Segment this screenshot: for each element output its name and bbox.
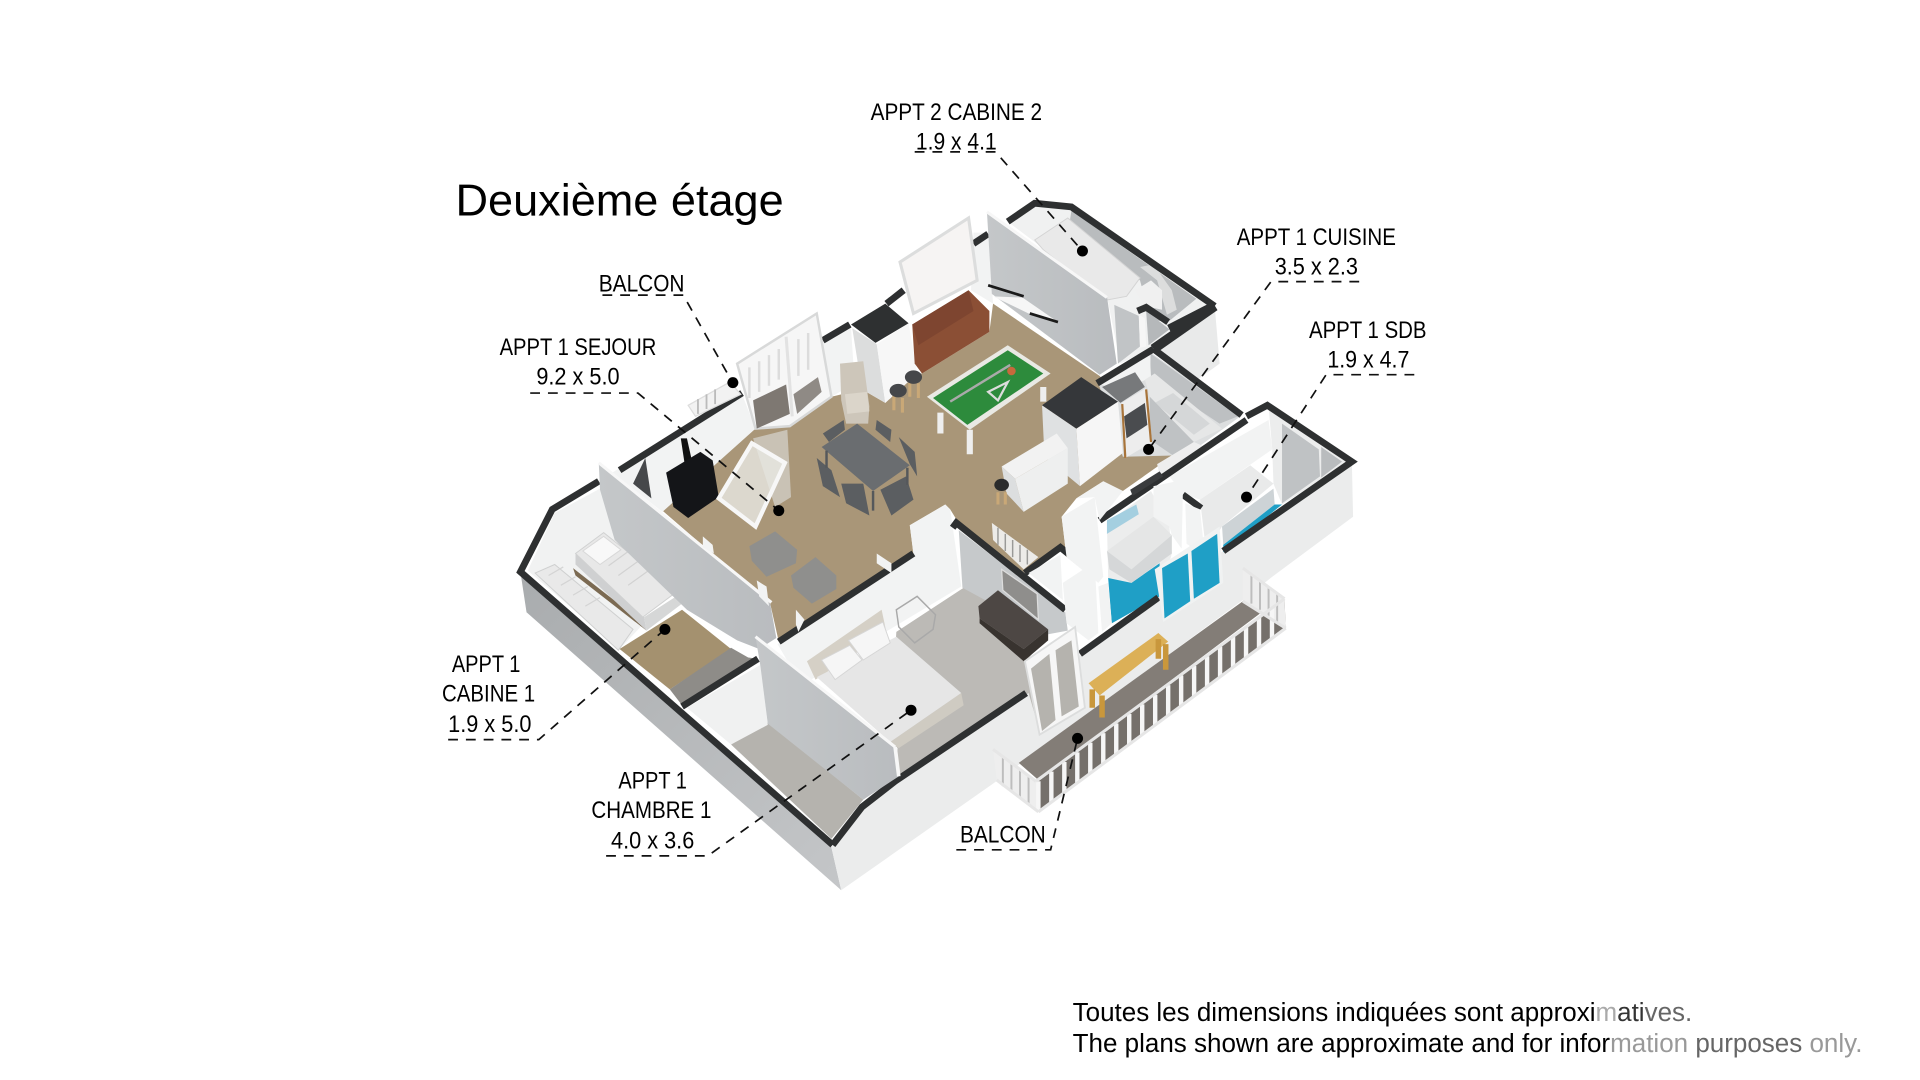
room: Appt 1 SDB (1169, 407, 1352, 552)
pool table (927, 345, 1051, 454)
label: balcon north: BALCON (599, 270, 684, 297)
bench (535, 564, 633, 650)
dresser (978, 590, 1048, 661)
callout leader lines (448, 152, 1414, 856)
label: Appt 1 SDB (1309, 317, 1427, 373)
stools (890, 370, 1009, 504)
washbasin (1107, 517, 1172, 583)
label: Appt 1 chambre 1: APPT 1 (618, 768, 687, 795)
bathtub (1200, 465, 1273, 551)
poufs (749, 531, 836, 604)
armchair (840, 361, 869, 424)
dark-top unit (1042, 377, 1123, 486)
large window (900, 218, 977, 313)
blue floor strip (1223, 504, 1282, 552)
wall mirror (1002, 569, 1038, 620)
cabine 2 wardrobe panel (987, 212, 1117, 375)
wall: living room back wall (612, 233, 993, 512)
wood stove with flue (666, 438, 719, 518)
sofa (912, 290, 989, 373)
label: Appt 1 sejour: 9.2 x 5.0 (536, 363, 620, 390)
callout dots (659, 246, 1252, 744)
label: Appt 1 cabine 1 (442, 651, 535, 738)
kitchen counter (1145, 373, 1222, 475)
label: Appt 1 cabine 1: APPT 1 (452, 651, 520, 678)
label: Appt 1 cabine 1: CABINE 1 (442, 681, 535, 708)
stairs black lines (988, 285, 1058, 322)
footer note: Toutes les dimensions indiquées sont approximatives. (1073, 997, 1692, 1027)
single bed (576, 533, 682, 631)
bed (1035, 218, 1140, 300)
label: Appt 1 sejour (500, 334, 656, 390)
label: Appt 1 SDB: 1.9 x 4.7 (1327, 346, 1409, 373)
open door frame (719, 443, 785, 527)
label: Appt 1 sejour: APPT 1 SEJOUR (500, 334, 656, 361)
black wall tops (520, 203, 1352, 845)
under-bed edge (573, 568, 647, 631)
room: Appt 1 cabine 1 (528, 489, 682, 650)
dining table and chairs (817, 420, 917, 516)
label: Appt 2 cabine 2 (871, 99, 1042, 155)
grey door panel (1114, 305, 1140, 364)
exterior walls (520, 306, 1353, 890)
label: Appt 1 cuisine: 3.5 x 2.3 (1275, 253, 1358, 280)
footer note: The plans shown are approximate and for information purposes only. (1073, 1028, 1862, 1058)
washbasin (1135, 280, 1162, 310)
label: Appt 2 cabine 2: 1.9 x 4.1 (916, 128, 997, 155)
room: Appt 1 chambre 1 (687, 504, 1068, 748)
double bed (807, 610, 964, 748)
lounge armchair (753, 430, 791, 507)
interior white piers (703, 323, 1205, 640)
label: Appt 1 chambre 1: 4.0 x 3.6 (611, 828, 694, 855)
label: balcon south: BALCON (960, 821, 1046, 848)
cabine 1 wardrobe panel (599, 463, 776, 649)
footer note (1073, 997, 1862, 1058)
chimney block top (851, 304, 909, 343)
label: Appt 1 chambre 1: CHAMBRE 1 (591, 797, 711, 824)
label: Appt 1 cabine 1: 1.9 x 5.0 (448, 711, 531, 738)
white strip (1139, 315, 1146, 348)
label: Appt 2 cabine 2: APPT 2 CABINE 2 (871, 99, 1042, 126)
small railing by shower (992, 523, 1038, 569)
glass side table (896, 596, 936, 643)
label: Appt 1 SDB: APPT 1 SDB (1309, 317, 1427, 344)
room: Appt 2 cabine 2 (1008, 203, 1215, 364)
oven tower (1102, 372, 1152, 458)
room: shower room (1107, 491, 1172, 623)
grey tub front (1222, 489, 1275, 545)
television (633, 458, 651, 498)
blue tint behind basin (1107, 504, 1139, 534)
grey door panel (1282, 424, 1320, 503)
label: Appt 1 cuisine (1237, 224, 1396, 280)
title: Deuxième étage (456, 177, 784, 226)
chambre wardrobe panel (756, 637, 899, 800)
shower tube (1140, 264, 1177, 315)
room floors (620, 304, 1173, 839)
bedroom balcony door (1025, 627, 1085, 735)
grey recess (1146, 311, 1169, 345)
white cabinet (1002, 433, 1068, 512)
kitchen hob strip (1130, 471, 1163, 496)
bench (1089, 633, 1168, 718)
balcony door with small railing (688, 313, 831, 429)
balcony (993, 568, 1286, 812)
room: Appt 1 cuisine (1002, 353, 1240, 512)
label: Appt 1 cuisine: APPT 1 CUISINE (1237, 224, 1396, 251)
label: Appt 1 chambre 1 (591, 768, 711, 855)
shower glazed door (1155, 527, 1223, 622)
